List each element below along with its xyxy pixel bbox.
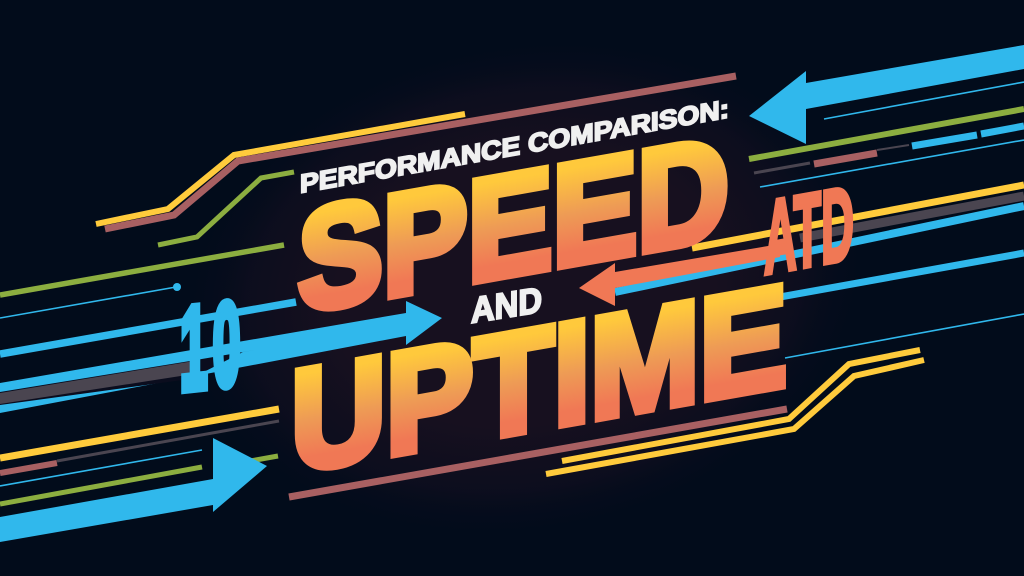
blue arrow lower left: [0, 438, 267, 542]
grey dash: [877, 145, 909, 150]
thin blue line with dot: [0, 283, 181, 318]
upper yellow line: [562, 350, 920, 461]
green line: [749, 109, 1024, 159]
maroon circuit line: [105, 76, 736, 229]
maroon underline: [289, 409, 787, 497]
yellow line: [0, 409, 279, 458]
orange arrow pointing left: [579, 244, 780, 306]
top-right arrow pointing left: [749, 45, 1024, 144]
maroon segment: [0, 463, 57, 473]
thin blue line: [785, 314, 1024, 358]
lower yellow line: [546, 360, 924, 474]
title backing panel: [137, 0, 913, 576]
grey band: [0, 360, 200, 404]
thin blue line: [0, 450, 202, 486]
lower-left speed lines: [0, 409, 279, 504]
infographic canvas: ATD: [764, 165, 854, 297]
lower-right yellow circuit lines: [546, 350, 924, 474]
top-left circuit lines: [96, 76, 736, 245]
green line: [0, 467, 202, 504]
blue arrow pointing right: [0, 301, 442, 413]
yellow circuit line: [96, 114, 465, 224]
title: speed: SPEED: [298, 106, 729, 343]
blue line into S: [0, 302, 296, 354]
grey dash: [754, 163, 810, 173]
connector word: and: AND: [471, 279, 542, 331]
blue line: [780, 253, 1024, 297]
yellow line: [692, 185, 1024, 248]
grey band: [800, 196, 1024, 238]
top-right speed lines: [749, 82, 1024, 187]
blue line: [615, 206, 1024, 292]
maroon dash: [814, 153, 877, 164]
green stub: [250, 456, 278, 461]
blue dash: [981, 126, 1024, 134]
dark gap in arrow shaft: [0, 336, 337, 405]
blue dash: [912, 135, 977, 146]
thin blue line: [760, 140, 1024, 187]
grey line: [57, 421, 279, 461]
middle-right speed lines: [615, 185, 1024, 358]
number: 10: 10: [180, 278, 240, 416]
green circuit line: [158, 172, 294, 245]
green line: [0, 245, 284, 295]
thin blue line: [824, 82, 1024, 119]
left speed lines: [0, 245, 296, 354]
title: uptime: UPTIME: [291, 255, 787, 503]
subtitle: performance comparison: PERFORMANCE COMPARISON:: [300, 94, 729, 199]
